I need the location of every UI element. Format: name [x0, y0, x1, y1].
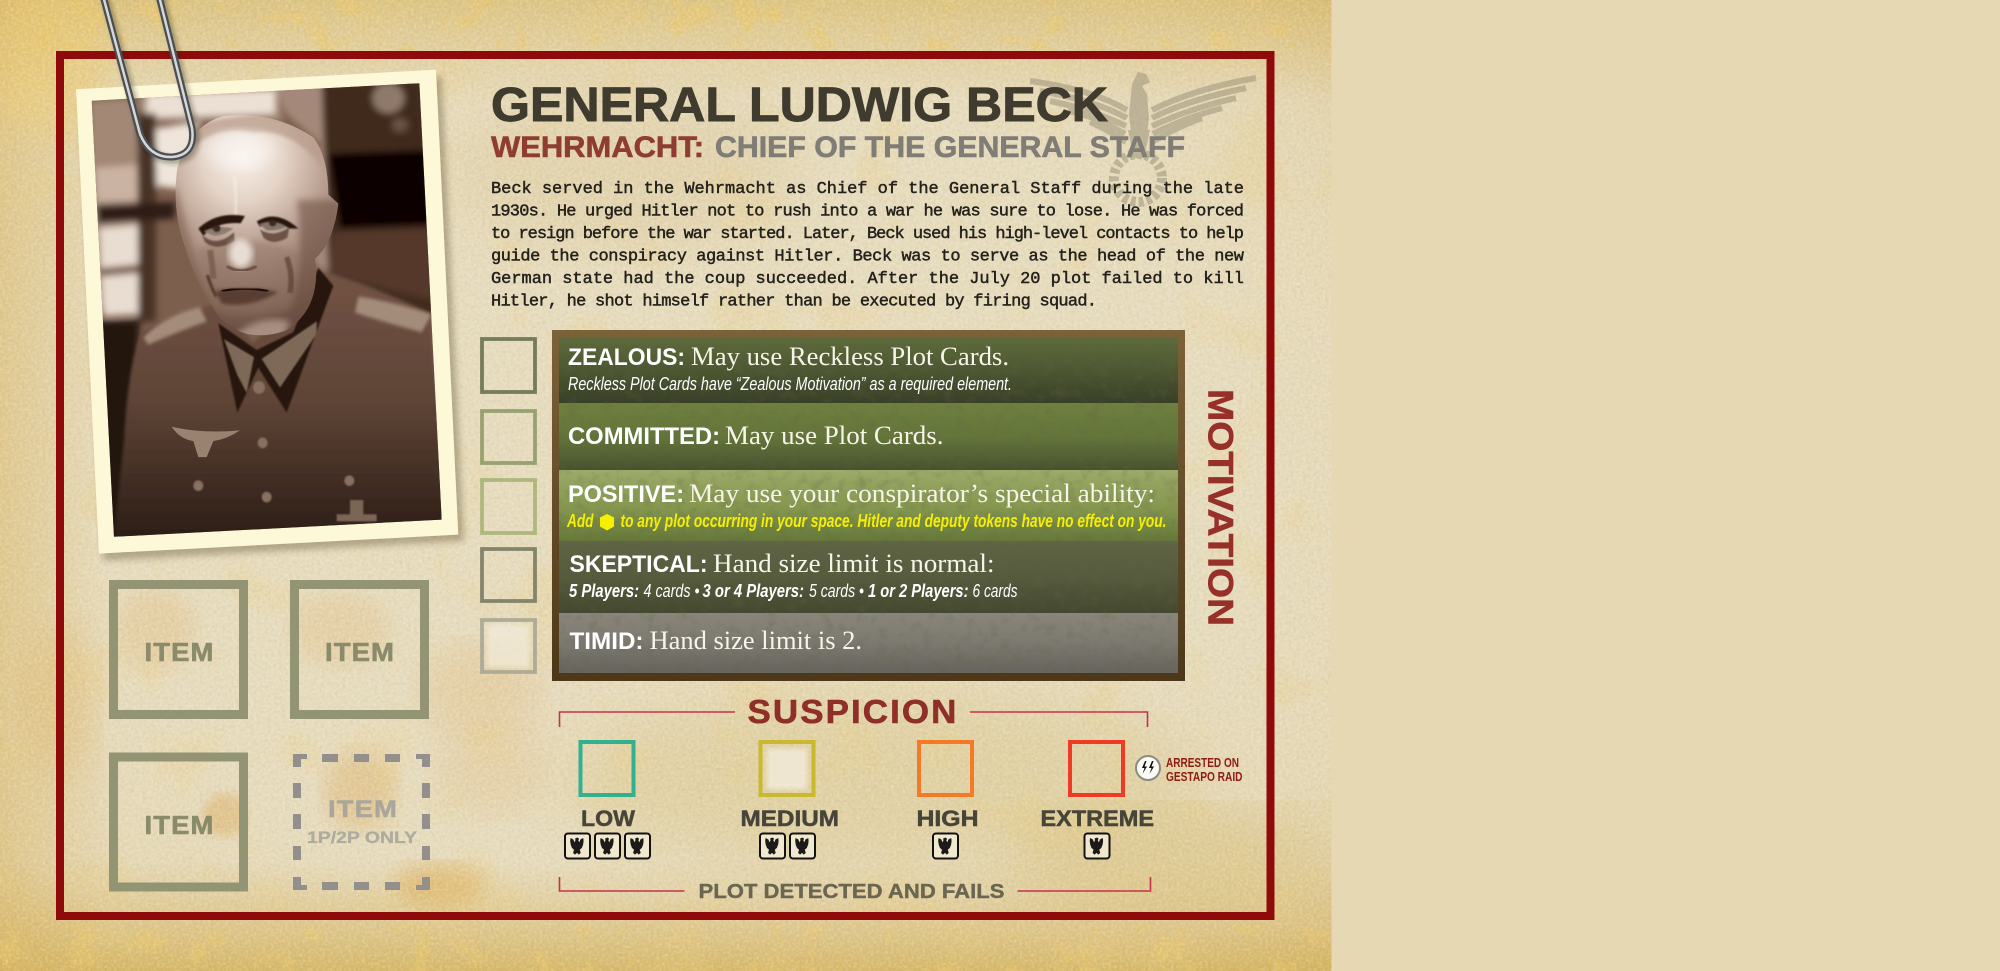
item slot 2 [294, 584, 424, 714]
band: zealous [559, 337, 1178, 403]
skeptical text: 3 or 4 Players: [702, 581, 804, 601]
suspicion level: low: LOW [581, 806, 635, 831]
paperclip [102, 0, 196, 160]
band: positive [559, 470, 1178, 541]
plot detected caption with bracket [560, 877, 1150, 903]
collar [218, 268, 333, 412]
positive text: May use your conspirator’s special ability: [689, 479, 1155, 508]
timid text: Hand size limit is 2. [650, 626, 862, 655]
skeptical text: 5 cards • [809, 581, 864, 601]
suspicion level: high [916, 806, 978, 858]
biography text: guide the conspiracy against Hitler. Beck was to serve as the head of the new [491, 248, 1245, 266]
insignia [172, 427, 240, 457]
positive text: POSITIVE: [568, 481, 684, 508]
skeptical text [569, 549, 1018, 601]
skeptical text: SKEPTICAL: [570, 551, 708, 578]
watermark: eagle emblem [1030, 72, 1256, 202]
item slot 1: ITEM [144, 639, 214, 667]
suspicion heading with bracket [560, 694, 1148, 731]
arrested on gestapo raid note: GESTAPO RAID [1166, 769, 1242, 784]
motivation checkboxes [482, 339, 535, 672]
biography text: to resign before the war started. Later, Beck used his high-level contacts to help [491, 225, 1244, 244]
suspicion box: extreme [1070, 742, 1123, 795]
infographic: character card [0, 0, 1332, 971]
item slot 4: 1P/2P only [293, 754, 430, 890]
timid text: TIMID: [570, 628, 644, 655]
skeptical text: Hand size limit is normal: [713, 549, 994, 578]
band: committed [559, 403, 1178, 470]
icon: die [600, 514, 614, 530]
zealous text: May use Reckless Plot Cards. [691, 342, 1009, 371]
photo print [76, 70, 464, 561]
item slot 4: 1P/2P only: ITEM [328, 796, 398, 823]
biography text: 1930s. He urged Hitler not to rush into a war he was sure to lose. He was forced [491, 202, 1244, 222]
item slot 3 [114, 757, 244, 887]
positive text: Add [566, 511, 594, 531]
skeptical text: 1 or 2 Players: [868, 581, 969, 601]
committed text: May use Plot Cards. [725, 421, 944, 450]
item slot 1 [114, 584, 244, 714]
committed text: COMMITTED: [568, 423, 720, 450]
suspicion box: low [580, 742, 634, 795]
suspicion heading with bracket: SUSPICION [748, 694, 958, 731]
item slot 3: ITEM [144, 812, 214, 840]
suspicion level: extreme: EXTREME [1040, 806, 1154, 831]
positive text: to any plot occurring in your space. Hitler and deputy tokens have no effect on you. [620, 511, 1166, 531]
biography text: Beck served in the Wehrmacht as Chief of the General Staff during the late [491, 180, 1244, 199]
arrested on gestapo raid note: ARRESTED ON [1166, 755, 1239, 770]
suspicion level: high: HIGH [916, 806, 978, 831]
subtitle: CHIEF OF THE GENERAL STAFF [715, 131, 1185, 164]
icon: gestapo raid token [1136, 756, 1160, 780]
suspicion box: high [919, 742, 972, 795]
subtitle [491, 131, 1185, 164]
band: skeptical [559, 541, 1178, 613]
arrested on gestapo raid note [1166, 755, 1242, 784]
motivation label: MOTIVATION [1200, 389, 1240, 626]
right blank panel [1331, 0, 2000, 971]
zealous text: ZEALOUS: [568, 344, 685, 371]
biography text: German state had the coup succeeded. After the July 20 plot failed to kill [491, 270, 1244, 289]
band: timid [559, 613, 1178, 673]
uniform [113, 271, 447, 543]
positive text [566, 479, 1166, 531]
title: GENERAL LUDWIG BECK [491, 78, 1108, 132]
suspicion level: low [565, 806, 650, 858]
skeptical text: 4 cards • [644, 581, 700, 601]
item slot 2: ITEM [325, 639, 395, 667]
plot detected caption with bracket: PLOT DETECTED AND FAILS [698, 880, 1004, 903]
suspicion box: medium [760, 742, 814, 795]
head [176, 115, 338, 336]
skeptical text: 5 Players: [569, 581, 639, 601]
panel: motivation track [552, 330, 1185, 681]
item slot 4: 1P/2P only: 1P/2P ONLY [307, 829, 417, 847]
zealous text: Reckless Plot Cards have “Zealous Motivation” as a required element. [568, 374, 1012, 394]
subtitle: WEHRMACHT: [491, 131, 704, 164]
red frame border [60, 55, 1270, 916]
parchment background [0, 0, 1350, 971]
biography text: Hitler, he shot himself rather than be executed by firing squad. [491, 292, 1097, 312]
skeptical text: 6 cards [972, 581, 1018, 601]
suspicion level: extreme [1040, 806, 1154, 858]
committed text [568, 421, 944, 450]
suspicion level: medium: MEDIUM [740, 806, 839, 831]
zealous text [568, 342, 1012, 394]
suspicion level: medium [740, 806, 839, 858]
biography text [491, 180, 1245, 312]
portrait [87, 79, 447, 546]
